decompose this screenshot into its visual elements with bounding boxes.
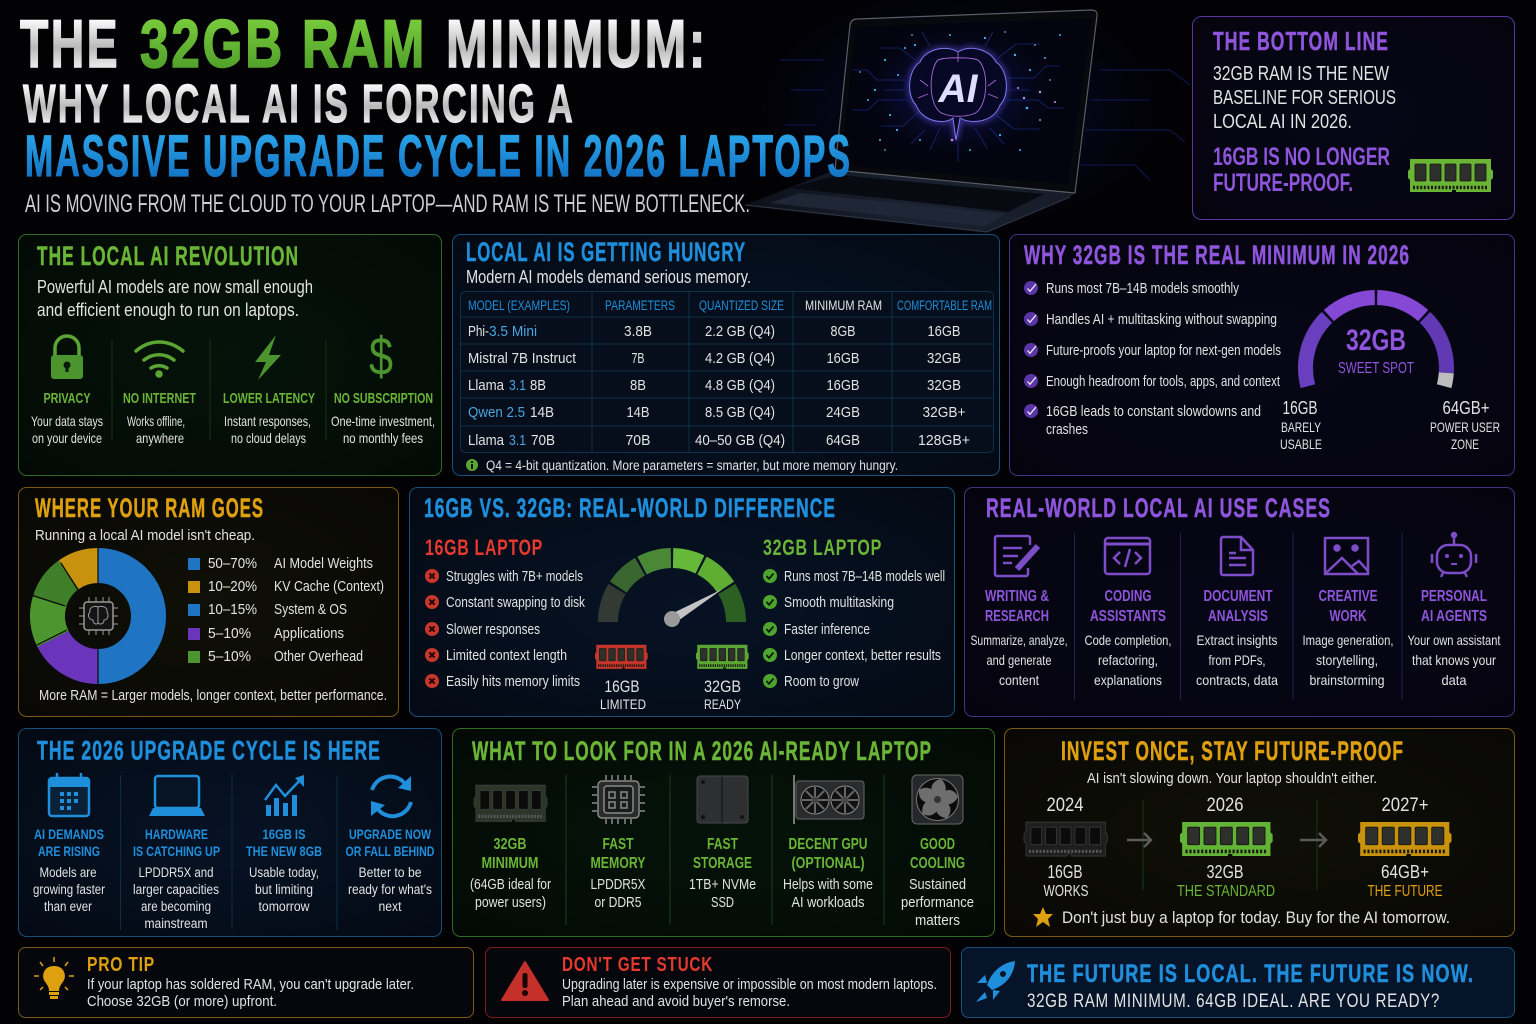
use case: personal AI agents: AI AGENTS [1421,608,1487,625]
row: Llama 3.1 70B [468,432,970,449]
row: Phi-3.5 Mini: 2.2 GB (Q4) [705,323,775,340]
timeline: 2026: 32GB [1206,862,1244,882]
item: fast memory [590,836,646,911]
title: THE [20,6,120,82]
row: Phi-3.5 Mini: Phi- [468,323,489,340]
icon: padlock [51,336,83,379]
item: AI demands are rising: than ever [44,899,92,914]
row: Llama 3.1 8B: 8B [630,377,646,394]
panel: invest once, stay future-proof [1004,728,1514,936]
item: hardware is catching up: larger capacities [133,882,219,897]
row: Llama 3.1 8B [468,377,961,394]
gauge label: 64GB+ power user zone: ZONE [1451,436,1479,452]
row: Qwen 2.5 14B: 14B [530,404,554,421]
legend: RAM allocation: Applications [274,625,344,642]
item: AI demands are rising: AI DEMANDS [34,826,104,842]
arrow: 2026 to 2027+ [1300,833,1326,847]
panel: the local AI revolution [18,234,442,476]
timeline: 2026 [1177,795,1275,900]
use case: personal AI agents: that knows your [1412,652,1496,668]
item: decent GPU [783,836,873,911]
icon: lightning bolt [255,335,281,380]
row: Llama 3.1 70B: Llama [468,432,505,449]
label: 32GB ready [704,677,742,712]
heading: don't get stuck: DON'T GET STUCK [562,954,713,976]
row: Mistral 7B Instruct: 16GB [826,350,860,367]
icon: star [1033,907,1053,927]
column: 32GB laptop: Room to grow [784,673,859,690]
item: hardware is catching up: LPDDR5X and [138,865,214,880]
column: 16GB laptop: 16GB LAPTOP [425,535,543,560]
title [20,6,852,189]
closing line: 32GB RAM MINIMUM. 64GB IDEAL. ARE YOU READY? [1027,991,1440,1012]
panel: the future is local [962,948,1514,1018]
use case: personal AI agents: Your own assistant [1408,632,1501,648]
icon: refresh arrows [371,776,411,816]
intro text: and efficient enough to run on laptops. [37,300,299,320]
use case: writing and research: WRITING & [985,588,1049,605]
row: Llama 3.1 8B: 3.1 [509,377,526,394]
item: 16GB is the new 8GB: THE NEW 8GB [246,843,322,859]
icon: writing [995,536,1038,576]
icon: code window [1105,538,1150,574]
gauge label: 16GB barely usable: 16GB [1282,398,1318,418]
panel: don't get stuck [486,948,950,1018]
legend: RAM allocation: Other Overhead [274,648,363,665]
item: upgrade now or fall behind: next [378,899,402,914]
icon: info [466,459,478,471]
icon: dollar sign: $ [369,327,393,387]
timeline: 2027+: 64GB+ [1381,862,1429,882]
feature: privacy [31,390,103,446]
item: 16GB is the new 8GB [246,826,322,914]
use case: coding assistants: Code completion, [1084,632,1172,648]
pro tip text: Choose 32GB (or more) upfront. [87,994,277,1010]
table header row: QUANTIZED SIZE [699,298,784,313]
gauge value: 32GB sweet spot [1338,324,1414,377]
timeline: 2027+ [1358,795,1452,900]
item: AI demands are rising: Models are [40,865,96,880]
row: Phi-3.5 Mini [468,323,960,340]
timeline: 2027+: THE FUTURE [1368,883,1442,900]
icon: graphics card [794,775,864,824]
column: 16GB laptop: Constant swapping to disk [446,594,585,611]
column: 32GB laptop: Longer context, better results [784,647,941,664]
use case: writing and research: RESEARCH [985,608,1049,625]
gauge: sweet spot [1306,298,1446,386]
use case: creative work: Image generation, [1302,632,1394,648]
subheading: Modern AI models demand serious memory. [466,267,751,287]
heading: the bottom line: THE BOTTOM LINE [1213,26,1389,56]
icon: laptop [149,776,205,816]
column: 32GB laptop: 32GB LAPTOP [763,535,882,560]
table header row: PARAMETERS [605,298,675,313]
use case: document analysis: contracts, data [1196,672,1278,688]
timeline: 2026: THE STANDARD [1177,883,1275,900]
title: WHY LOCAL AI IS FORCING A [23,74,575,134]
takeaway: More RAM = Larger models, longer context, better performance. [39,687,387,704]
item: decent GPU: (OPTIONAL) [792,855,864,872]
use case: coding assistants: ASSISTANTS [1090,608,1166,625]
item: fast memory: FAST [602,836,634,853]
legend: RAM allocation: AI Model Weights [274,555,373,572]
heading: where your RAM goes: WHERE YOUR RAM GOES [35,493,264,523]
column: 16GB laptop: Easily hits memory limits [446,673,580,690]
row: Qwen 2.5 14B: 8.5 GB (Q4) [705,404,775,421]
item: hardware is catching up: are becoming [141,899,211,914]
item: decent GPU: AI workloads [792,895,864,911]
table footnote: Q4 = 4-bit quantization. More parameters = smarter, but more memory hungry. [486,458,898,473]
item: fast storage: 1TB+ NVMe [689,877,756,893]
use case: writing and research: and generate [986,652,1052,668]
icon: green RAM stick [1408,159,1493,192]
subheading: AI isn't slowing down. Your laptop shouldn't either. [1087,770,1377,787]
future-proof warning: FUTURE-PROOF. [1213,169,1353,197]
item: fast storage: STORAGE [693,855,752,872]
use case: writing and research: Summarize, analyze, [970,632,1068,648]
item: good cooling: performance [901,895,974,911]
row: Llama 3.1 8B: Llama [468,377,505,394]
timeline: 2024: WORKS [1044,883,1088,900]
item: hardware is catching up: HARDWARE [145,826,208,842]
use case: writing and research: content [999,672,1039,688]
column: 16GB laptop: Struggles with 7B+ models [446,568,583,585]
panel: what to look for in an AI-ready laptop [452,728,994,936]
use case: writing and research [970,588,1068,688]
icon: AI chip in donut center [79,597,118,635]
item: upgrade now or fall behind [346,826,434,914]
label: 16GB limited: LIMITED [600,696,646,712]
item: fast storage [689,836,756,911]
icon: cooling fan [912,775,963,824]
item: good cooling: Sustained [909,877,966,893]
feature: no subscription: NO SUBSCRIPTION [334,390,433,407]
row: Llama 3.1 70B: 3.1 [509,432,526,449]
icon: rocket [976,961,1015,1002]
item: hardware is catching up [133,826,220,931]
feature: privacy: Your data stays [31,413,103,429]
column: 32GB laptop: Faster inference [784,621,870,638]
column: 32GB laptop [763,535,945,690]
item: fast memory: MEMORY [590,855,646,872]
timeline: 2024: 16GB [1048,862,1082,882]
icon: dark RAM module [474,785,547,821]
item: fast memory: LPDDR5X [590,877,646,893]
feature: lower latency: Instant responses, [224,413,311,429]
heading: real-world difference: 16GB VS. 32GB: REAL-WORLD DIFFERENCE [424,493,836,523]
pro tip text [87,977,414,1010]
label: 32GB ready: 32GB [704,677,741,696]
feature: no subscription [331,390,435,446]
gauge label: 16GB barely usable: BARELY [1281,419,1321,435]
column: 32GB laptop: Runs most 7B–14B models well [784,568,945,585]
row: Phi-3.5 Mini: 8GB [830,323,856,340]
use case: coding assistants: refactoring, [1098,652,1158,668]
subtitle: AI IS MOVING FROM THE CLOUD TO YOUR LAPTOP—AND RAM IS THE NEW BOTTLENECK. [25,190,750,218]
item: hardware is catching up: mainstream [144,916,208,931]
use case: document analysis: ANALYSIS [1208,608,1268,625]
timeline: 2024 [1024,795,1107,900]
heading: pro tip: PRO TIP [87,954,155,976]
column: 32GB laptop: Smooth multitasking [784,594,894,611]
panel: why 32GB is the real minimum [1010,234,1514,476]
use case: document analysis: Extract insights [1196,632,1278,648]
legend: RAM allocation: 10–20% [208,578,257,595]
use case: personal AI agents: PERSONAL [1421,588,1487,605]
pro tip text: If your laptop has soldered RAM, you can't upgrade later. [87,977,414,993]
table header row [468,298,992,313]
checklist of reasons: Handles AI + multitasking without swapping [1046,312,1277,328]
table header row: MINIMUM RAM [805,298,882,313]
item: upgrade now or fall behind: Better to be [358,865,422,880]
table header row: COMFORTABLE RAM [897,298,992,313]
icon: red 16GB RAM [595,645,648,669]
use case: personal AI agents: data [1442,672,1467,688]
checklist of reasons [1024,281,1281,438]
item: 32GB minimum: (64GB ideal for [470,877,551,893]
use case: creative work: CREATIVE [1318,588,1378,605]
warning text [562,977,937,1010]
item: 16GB is the new 8GB: 16GB IS [262,826,306,842]
warning text: Upgrading later is expensive or impossible on most modern laptops. [562,977,937,993]
checklist of reasons: Enough headroom for tools, apps, and context [1046,374,1280,390]
item: fast storage: SSD [711,895,734,911]
heading: upgrade cycle: THE 2026 UPGRADE CYCLE IS HERE [37,736,381,766]
bottom line statement: 32GB RAM IS THE NEW [1213,63,1389,85]
label: 32GB ready: READY [704,696,742,712]
gauge label: 64GB+ power user zone: 64GB+ [1442,398,1490,418]
feature: lower latency [223,390,315,446]
row: Llama 3.1 70B: 70B [626,432,650,449]
use case: coding assistants: CODING [1104,588,1152,605]
donut chart: RAM allocation [31,548,148,684]
item: 32GB minimum: 32GB [494,836,526,853]
use case: document analysis [1196,588,1278,688]
gauge label: 16GB barely usable [1280,398,1322,452]
feature: lower latency: no cloud delays [231,430,306,446]
item: 32GB minimum: MINIMUM [482,855,538,872]
icon: wifi [136,342,183,376]
checklist of reasons: 16GB leads to constant slowdowns and [1046,404,1261,420]
row: Qwen 2.5 14B: 32GB+ [922,404,966,421]
row: Mistral 7B Instruct [468,350,961,367]
item: good cooling: matters [915,913,960,929]
legend: RAM allocation: 5–10% [208,648,251,665]
laptop illustration with AI brain [735,0,1190,245]
panel: 16GB vs 32GB [410,488,954,716]
item: fast storage: FAST [707,836,738,853]
checklist of reasons: Future-proofs your laptop for next-gen models [1046,343,1281,359]
warning text: Plan ahead and avoid buyer's remorse. [562,994,790,1010]
legend: RAM allocation: 5–10% [208,625,251,642]
panel: where your RAM goes [18,488,398,716]
item: upgrade now or fall behind: UPGRADE NOW [349,826,432,842]
row: Mistral 7B Instruct: 7B [632,350,644,367]
feature: privacy: on your device [32,430,102,446]
feature: privacy: PRIVACY [44,390,90,407]
row: Mistral 7B Instruct: 32GB [927,350,961,367]
item: good cooling [901,836,974,929]
row: Llama 3.1 8B: 32GB [927,377,961,394]
table: model memory requirements [460,291,994,452]
legend: RAM allocation: 50–70% [208,555,257,572]
subheading: Running a local AI model isn't cheap. [35,527,255,544]
row: Llama 3.1 70B: 128GB+ [918,432,970,449]
row: Llama 3.1 8B: 8B [530,377,546,394]
bottom line statement: LOCAL AI IN 2026. [1213,111,1352,133]
item: upgrade now or fall behind: OR FALL BEHIND [346,843,434,859]
label: 16GB limited: 16GB [604,677,640,696]
icon: growth chart [265,775,304,816]
use case: personal AI agents [1408,588,1501,688]
row: Qwen 2.5 14B: 24GB [826,404,860,421]
icon: light bulb [34,957,74,999]
gauge value: 32GB sweet spot: 32GB [1346,324,1406,357]
row: Qwen 2.5 14B: Qwen 2.5 [468,404,525,421]
row: Llama 3.1 70B: 40–50 GB (Q4) [695,432,785,449]
item: AI demands are rising: growing faster [33,882,105,897]
legend: RAM allocation: System & OS [274,601,347,618]
item: hardware is catching up: IS CATCHING UP [133,843,220,859]
checklist of reasons: crashes [1046,422,1088,438]
item: 32GB minimum [470,836,551,911]
column: 16GB laptop: Slower responses [446,621,540,638]
row: Llama 3.1 70B: 70B [531,432,555,449]
heading: local AI revolution: THE LOCAL AI REVOLUTION [37,241,299,271]
heading: use cases: REAL-WORLD LOCAL AI USE CASES [986,493,1331,523]
item: upgrade now or fall behind: ready for what's [348,882,432,897]
gauge label: 64GB+ power user zone: POWER USER [1430,419,1500,435]
row: Qwen 2.5 14B: 14B [626,404,650,421]
feature: no internet: NO INTERNET [123,390,196,407]
use case: creative work: WORK [1330,608,1367,625]
row: Llama 3.1 8B: 4.8 GB (Q4) [705,377,775,394]
checklist of reasons: Runs most 7B–14B models smoothly [1046,281,1240,297]
bottom line statement: BASELINE FOR SERIOUS [1213,87,1396,109]
row: Phi-3.5 Mini: 3.8B [624,323,652,340]
feature: no subscription: no monthly fees [343,430,423,446]
icon: memory chip [592,775,645,824]
AI label on laptop screen: AI [938,67,978,111]
legend: RAM allocation [188,555,384,665]
feature: no subscription: One-time investment, [331,413,435,429]
gauge label: 64GB+ power user zone [1430,398,1500,452]
title: MASSIVE UPGRADE CYCLE IN 2026 LAPTOPS [25,124,852,189]
feature: no internet: anywhere [136,430,184,446]
item: decent GPU: Helps with some [783,877,873,893]
icon: green 32GB RAM [696,645,749,669]
panel: pro tip [18,948,474,1018]
use case: document analysis: from PDFs, [1208,652,1266,668]
item: decent GPU: DECENT GPU [788,836,868,853]
future-proof warning [1213,143,1390,197]
row: Llama 3.1 8B: 16GB [826,377,860,394]
feature: lower latency: LOWER LATENCY [223,390,315,407]
title: 32GB RAM [140,6,427,82]
row: Phi-3.5 Mini: 3.5 Mini [489,323,537,340]
panel: local AI is getting hungry [452,234,1000,476]
panel: real-world local AI use cases [964,488,1514,716]
heading: getting hungry: LOCAL AI IS GETTING HUNGRY [466,237,746,267]
item: AI demands are rising: ARE RISING [38,843,100,859]
heading: what to look for: WHAT TO LOOK FOR IN A 2026 AI-READY LAPTOP [472,736,932,766]
legend: RAM allocation: KV Cache (Context) [274,578,384,595]
row: Phi-3.5 Mini: 16GB [928,323,960,340]
gauge label: 16GB barely usable: USABLE [1280,436,1322,452]
use case: coding assistants: explanations [1094,672,1162,688]
timeline: 2027+: 2027+ [1382,795,1428,816]
panel: the 2026 upgrade cycle [18,728,442,936]
timeline: 2024: 2024 [1046,795,1084,816]
label: 16GB limited [600,677,646,712]
item: 16GB is the new 8GB: Usable today, [249,865,319,880]
row: Mistral 7B Instruct: 4.2 GB (Q4) [705,350,775,367]
bottom line statement [1213,63,1396,133]
use case: creative work [1302,588,1394,688]
item: fast memory: or DDR5 [594,895,642,911]
intro text: Powerful AI models are now small enough [37,277,313,297]
gauge value: 32GB sweet spot: SWEET SPOT [1338,360,1414,377]
item: good cooling: COOLING [910,855,965,872]
legend: RAM allocation: 10–15% [208,601,257,618]
icon: document [1221,537,1253,575]
item: 32GB minimum: power users) [475,895,546,911]
feature: no internet [123,390,196,446]
gauge: speed dial with needle [608,558,736,627]
table header row: MODEL (EXAMPLES) [468,298,570,313]
item: 16GB is the new 8GB: but limiting [255,882,313,897]
future-proof warning: 16GB IS NO LONGER [1213,143,1390,171]
icon: robot agent [1432,533,1476,577]
closing advice: Don't just buy a laptop for today. Buy for the AI tomorrow. [1062,908,1450,927]
row: Llama 3.1 70B: 64GB [826,432,860,449]
intro text [37,277,313,320]
panel: the bottom line [1192,16,1514,220]
item: good cooling: GOOD [920,836,955,853]
item: AI demands are rising [33,826,105,914]
use case: coding assistants [1084,588,1172,688]
row: Qwen 2.5 14B [468,404,966,421]
use case: document analysis: DOCUMENT [1204,588,1273,605]
column: 16GB laptop [425,535,585,690]
icon: SSD [697,776,748,823]
feature: no internet: Works offline, [127,413,185,429]
icon: image [1325,538,1368,574]
column: 16GB laptop: Limited context length [446,647,567,664]
arrow: 2024 to 2026 [1127,833,1151,847]
row: Mistral 7B Instruct: Mistral 7B Instruct [468,350,577,367]
icon: calendar [49,773,89,816]
use case: creative work: brainstorming [1310,672,1384,688]
icon: warning triangle [502,962,548,1000]
item: 16GB is the new 8GB: tomorrow [258,899,310,914]
use case: creative work: storytelling, [1316,652,1378,668]
title: MINIMUM: [446,6,708,82]
timeline: 2026: 2026 [1206,795,1244,816]
